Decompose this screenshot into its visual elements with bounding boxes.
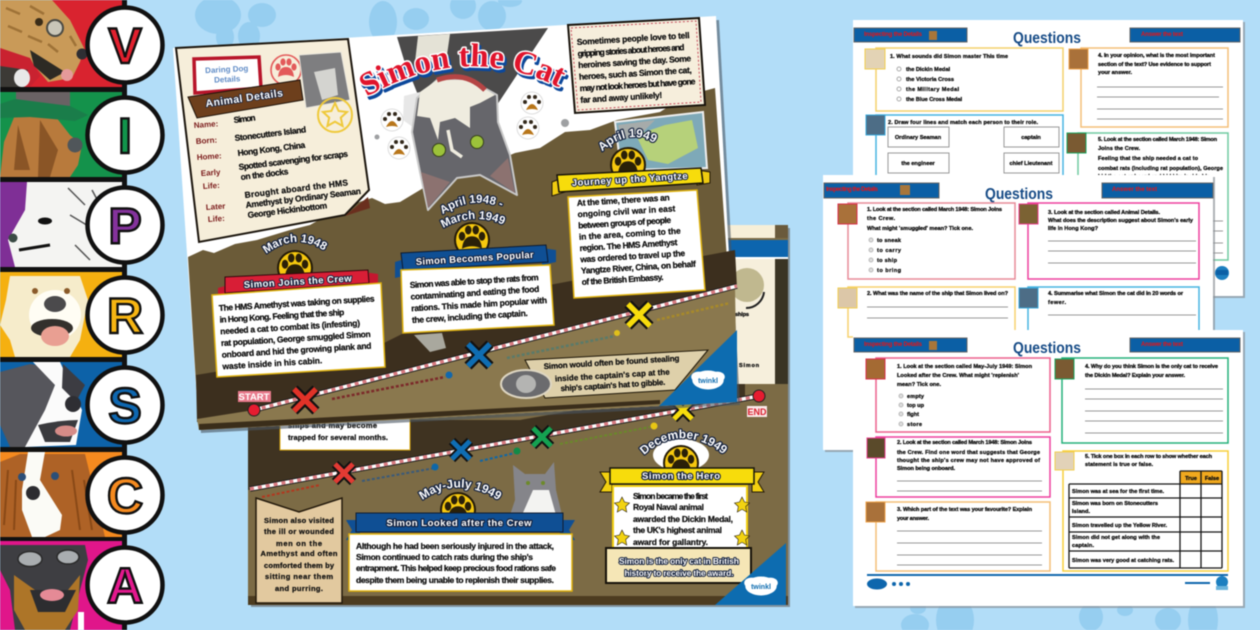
section: Journey up the Yangtze: in the area, coming to the [579,226,681,242]
question 5 box [1067,133,1228,260]
question 5 box and true or false table: statement is true or false. [1085,462,1153,468]
question 2 box [838,287,1015,337]
small cat photo [510,462,562,515]
START label: START [239,392,270,403]
footer logo [1215,266,1229,280]
question 1 box [866,358,1050,432]
question 1 box: What might 'smuggled' mean? Tick one. [867,226,973,232]
badge V [88,8,162,82]
question 2 box: thought the ship's crew may not have approved of [897,458,1040,464]
section: Simon the Hero: the UK's highest animal [633,525,722,535]
question 2 box: 2. Look at the section called March 1948: Simon Joins [897,440,1032,446]
section: Simon Looked after the Crew: Simon continued to catch rats during the ship's [356,552,533,562]
timeline rope with markers [250,390,765,497]
question 1 box: the Crew. [867,216,895,222]
section: Simon the Hero: Royal Naval animal [633,502,704,512]
cat illustration [397,28,548,210]
panel: animal details card [176,39,369,242]
section: Journey up the Yangtze: of the British Embassy. [581,272,664,287]
question 4 box: section of the text? Use evidence to support [1098,62,1211,68]
left tan fact card: sitting near them [265,572,333,581]
badge S [88,368,162,442]
question 1 box: to carry [877,248,902,254]
note card with captain's cap: ship's captain's hat to gibble. [560,378,666,393]
badge R: R [107,288,143,344]
callout: only cat [606,548,751,583]
dog panel: retrieval [0,272,122,357]
question 1 box: the Blue Cross Medal [906,97,962,103]
intro text box: Sometimes people love to tell [577,30,690,47]
star stamp [318,98,352,132]
header tabs: Answer the text [1141,342,1183,348]
question 5 box and true or false table: Island. [1072,509,1090,515]
question 3 box: 3. Which part of the text was your favourite? Explain [897,507,1033,513]
question 2 box: Ordinary Seaman [895,135,942,141]
question 2 box [866,115,1063,185]
left tan fact card [256,498,342,603]
question 1 box: the Dickin Medal [906,67,950,73]
question 1 box: the Victoria Cross [906,77,954,83]
left tan fact card: and purring. [275,584,323,593]
header tabs: Inspecting the Details [864,32,923,38]
badge P: P [108,198,142,254]
intro text box [568,18,705,113]
section: Simon the Hero: December 1949 [638,428,729,456]
dog panel: clarify [0,452,122,537]
question 2 box: captain [1021,135,1041,141]
badge A [88,548,162,622]
question 4 box: 4. Summarise what Simon the cat did in 20 words or [1048,291,1184,297]
twinkl corner [715,543,786,605]
detail rows: Life: [208,214,225,224]
intro text box: heroines saving the day. Some [578,53,692,70]
map photo [615,112,707,170]
twinkl corner [659,330,737,406]
panel: VIPERS dog strip [0,0,127,630]
question 5 box and true or false table: 5. Tick one box in each row to show whether each [1085,454,1213,460]
twinkl corner: twinkl [698,378,718,385]
letter badges [88,8,162,622]
header tabs [824,183,1213,198]
cat photo [299,52,350,108]
detail rows: Home: [197,151,222,162]
intro text box: gripping stories about heroes and [577,42,685,59]
section: Simon Looked after the Crew: entrapment. This helped keep precious food rations safe [356,563,556,573]
intro text box: far and away unlikely! [580,90,663,105]
section: Simon Looked after the Crew: Simon Looked after the Crew [386,518,532,529]
header tabs: Inspecting the Details [864,342,923,348]
question 5 box and true or false table: Simon did not get along with the [1072,535,1160,541]
top right strip of poster 2 [725,225,788,384]
Animal Details ribbon [188,80,303,118]
section: Simon Becomes Popular: Simon Becomes Popular [416,250,534,268]
badge C: C [107,468,143,524]
question 5 box: combat rats (including rat population), George [1098,166,1223,172]
heading: Questions [1013,30,1081,47]
question 1 box: 1. Look at the section called March 1948: Simon Joins [867,207,1002,213]
question 5 box and true or false table: Simon was at sea for the first time. [1072,489,1164,495]
top right strip of poster 2: ships [735,312,749,318]
question 2 box [867,437,1050,497]
question 5 box and true or false table: Simon travelled up the Yellow River. [1072,523,1167,529]
section: Journey up the Yangtze: At the time, there was an [577,192,670,208]
detail rows: Amethyst by Ordinary Seaman [245,186,361,210]
title: Simon the Cat [359,41,570,100]
question 1 box: to sneak [877,238,902,244]
section: Journey up the Yangtze: April 1949 [598,126,659,153]
badge C [88,458,162,532]
Animal Details ribbon: Animal Details [205,87,284,110]
poster 2: Simon the Cat timeline page [247,224,790,608]
section: Simon Joins the Crew: needed a cat to combat its (infesting) [220,318,360,336]
section: Simon Joins the Crew: in Hong Kong. Feeling that the ship [219,307,345,325]
question 1 box: Looked after the Crew. What might 'replenish' [897,373,1020,379]
detail rows: Life: [203,181,220,191]
question 5 box and true or false table: Simon was born on Stonecutters [1072,501,1158,507]
question 4 box [1055,358,1228,443]
left tan fact card: men on the [276,539,322,548]
section: Simon Joins the Crew: onboard and hid the growing plank and [221,341,372,360]
question 5 box and true or false table: Simon was very good at catching rats. [1072,558,1174,564]
detail rows: Brought aboard the HMS [244,177,349,200]
question 5 box: 5. Look at the section called March 1948: Simon [1098,137,1218,143]
header tabs: Answer the text [1112,187,1157,193]
left tan fact card: Simon also visited [264,516,334,525]
white text card, partly hidden: trapped for several months. [288,433,388,442]
question 1 box: fight [907,412,919,418]
small paw prints [381,92,543,159]
heading: Questions [1013,340,1081,357]
section: Journey up the Yangtze: ongoing civil war in east [577,203,676,219]
detail rows: Hong Kong, China [237,140,306,158]
question 4 box: the Dickin Medal? Explain your answer. [1085,373,1185,379]
badge R [88,278,162,352]
question 4 box: 4. Why do you think Simon is the only cat to receive [1085,364,1218,370]
white text card, partly hidden: ships and may become [288,421,377,430]
question 1 box: mean? Tick one. [897,382,941,388]
question 5 box: hid the cat onboard and hid him inside his [1098,174,1210,180]
question 5 box and true or false table: False [1205,476,1219,482]
question 1 box: 1. Look at the section called May-July 1949: Simon [897,364,1033,370]
note card with captain's cap [501,350,708,398]
section: Simon the Hero: Simon became the first [633,491,708,501]
question 2 box: chief Lieutenant [1010,161,1053,167]
section: Journey up the Yangtze: was ordered to travel up the [579,248,686,264]
question 2 box: Simon being onboard. [897,466,955,472]
note card with captain's cap: inside the captain's cap at the [555,367,671,383]
callout: only cat: Simon is the only cat in British [619,556,739,566]
detail rows: Stonecutters Island [234,124,307,143]
question 1 box: store [907,422,922,428]
brown fold at card corner [345,197,370,216]
question 1 box [865,48,1063,111]
question 5 box: Feeling that the ship needed a cat to [1098,156,1199,162]
question 5 box and true or false table: captain. [1072,543,1094,549]
section: Simon Joins the Crew [210,232,386,378]
section: Simon Becomes Popular: the crew, including the captain. [412,308,528,325]
question 2 box: 2. What was the name of the ship that Simon lived on? [867,291,1009,297]
question 3 box: What does the description suggest about Simon's early [1048,218,1194,224]
question 2 box: the Crew. Find one word that suggests that George [897,450,1040,456]
question 3 box: your answer. [897,516,929,522]
white text card, partly hidden [280,417,410,450]
wood background [188,88,737,430]
section: Simon Becomes Popular: March 1949 [438,209,507,230]
section: Simon the Hero: award for gallantry. [633,537,708,547]
heading: Questions [985,186,1053,203]
intro text box: may not look heroes but have gone [579,76,696,93]
left tan fact card: the ill or wounded [264,527,334,536]
top right strip of poster 2: Simon [739,363,760,369]
grey speckles [374,119,569,140]
section: Simon Becomes Popular: April 1948 - [440,193,504,216]
badge V: V [108,18,142,74]
detail rows: Born: [196,136,217,146]
question 3 box [1019,203,1199,279]
badge P [88,188,162,262]
left tan fact card: Amethyst and often [260,549,338,558]
question 3 box: life in Hong Kong? [1048,226,1099,232]
dog panel: vocabulary [0,0,122,87]
section: Journey up the Yangtze: between groups of people [578,215,672,231]
detail rows: Name: [194,119,219,130]
question 5 box and true or false table [1055,451,1228,571]
dog panel: prediction [0,182,122,267]
poster 1: Simon the Cat fact page [172,16,740,434]
question 2 box: 2. Draw four lines and match each person to their role. [888,120,1038,126]
section: Simon Joins the Crew: March 1948 [260,232,329,255]
question 3 box: 3. Look at the section called Animal Details. [1048,210,1160,216]
question 4 box: 4. In your opinion, what is the most important [1098,53,1215,59]
badge A: A [107,558,143,614]
section: Simon the Hero [599,428,765,548]
section: Journey up the Yangtze: region. The HMS Amethyst [579,237,678,253]
section: Simon the Hero: Simon the Hero [642,471,720,482]
question 3 box [866,502,1050,571]
badge I: I [118,108,132,164]
dog panel: inference [0,92,122,177]
section: Simon Looked after the Crew: May-July 1949 [416,477,503,502]
worksheet B [823,175,1215,452]
section: Simon the Hero: awarded the Dickin Medal, [633,514,733,524]
question 1 box: top up [907,403,925,409]
END label: END [747,407,767,417]
question 5 box and true or false table: True [1185,476,1197,482]
left tan fact card: comforted them by [264,561,335,570]
question 1 box: to bring [877,268,902,274]
stamp label: Details [214,74,241,85]
grey rock under card [414,333,446,352]
section: Simon Becomes Popular: Simon was able to stop the rats from [410,272,539,290]
red paw stamp [271,55,301,85]
section: Simon Becomes Popular: rations. This made him popular with [411,295,547,313]
question 1 box: the Military Medal [906,87,959,93]
question 1 box [838,203,1015,279]
badge S: S [108,378,142,434]
question 4 box [1019,287,1199,337]
note card with captain's cap: Simon would often be found stealing [543,354,680,371]
timeline rope with markers [248,286,737,416]
question 4 box [1069,48,1228,127]
section: Simon Joins the Crew: rat population, George smuggled Simon [221,329,371,348]
section: Simon Becomes Popular [394,193,556,334]
question 1 box: to ship [877,258,898,264]
section: Simon Joins the Crew: waste inside in his cabin. [221,355,323,371]
intro text box: heroes, such as Simon the cat, [579,65,692,82]
header tabs: Inspecting the Details [826,187,879,193]
header tabs [854,338,1240,352]
question 5 box: Joins the Crew. [1098,146,1140,152]
stamp label [194,57,261,93]
section: Journey up the Yangtze: Journey up the Yangtze [572,171,688,189]
question 4 box: fewer. [1048,300,1066,306]
dog panel: sequence or summarise [0,362,122,447]
section: Journey up the Yangtze [551,126,711,300]
dog panel: author [0,541,122,630]
section: Simon Looked after the Crew: despite them being unable to replenish their supplies. [356,575,554,585]
header tabs [854,28,1240,42]
badge I [88,98,162,172]
detail rows: George Hickinbottom [247,200,328,220]
section: Simon Looked after the Crew [346,477,576,592]
detail rows: Later [206,202,226,212]
detail rows: on the docks [240,166,289,182]
footer [867,574,1228,590]
callout: only cat: history to receive the award. [624,568,734,578]
question 1 box: empty [907,394,925,400]
worksheet C [853,330,1245,608]
detail rows [194,112,361,224]
worksheet A [853,20,1245,298]
detail rows: Early [201,168,221,178]
stamp label: Daring Dog [205,64,249,75]
section: Simon Joins the Crew: Simon Joins the Crew [244,273,353,291]
question 1 box: 1. What sounds did Simon master This time [890,54,1008,60]
header tabs: Answer the text [1141,32,1183,38]
section: Simon Looked after the Crew: Although he had been seriously injured in the attack, [356,541,554,551]
section: Simon Joins the Crew: The HMS Amethyst was taking on supplies [219,293,375,313]
detail rows: Spotted scavenging for scraps [238,149,349,172]
question 2 box: the engineer [901,161,935,167]
section: Journey up the Yangtze: Yangtze River, China, on behalf [581,259,696,276]
detail rows: Simon [233,112,256,125]
question 4 box: your answer. [1098,70,1132,76]
section: Simon Becomes Popular: contaminating and eating the food [410,284,540,302]
twinkl corner: twinkl [751,584,771,591]
